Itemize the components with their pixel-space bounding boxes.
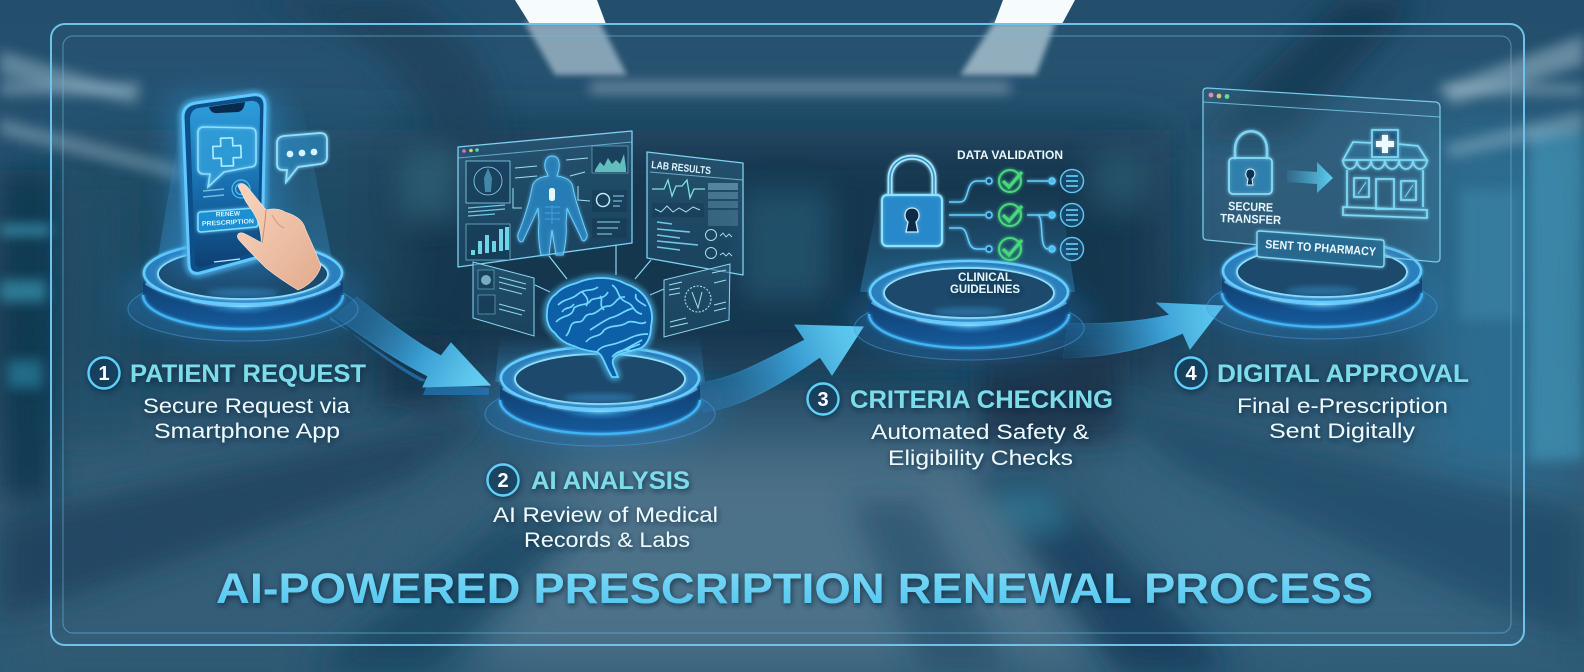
text: clinical guidelines: GUIDELINES (950, 284, 1020, 296)
step 3 label (808, 384, 1113, 470)
number badge 1 (88, 358, 120, 388)
step 2 illustration: AI brain with data panels (458, 131, 743, 452)
icon: hand tapping (237, 184, 321, 290)
text: clinical guidelines: CLINICAL (958, 272, 1012, 284)
heading: digital approval: DIGITAL APPROVAL (1217, 360, 1469, 388)
heading: AI analysis: AI ANALYSIS (531, 467, 690, 495)
text: step 4 description: Final e-Prescription (1237, 394, 1448, 418)
heading: lab results: LAB RESULTS (651, 159, 712, 177)
icon: document circles (1060, 170, 1084, 260)
icon: pharmacy storefront (1343, 130, 1427, 218)
panel: transfer window (1203, 88, 1440, 262)
heading: criteria checking: CRITERIA CHECKING (850, 386, 1113, 414)
panel: body scan dashboard (458, 131, 632, 267)
text: secure transfer: TRANSFER (1220, 211, 1282, 227)
icon: chat bubble (277, 133, 327, 182)
text: step 4 description: Sent Digitally (1269, 419, 1415, 443)
callout: sent to pharmacy (1257, 231, 1384, 267)
text: clinical guidelines (950, 272, 1020, 296)
text: step 3 description (871, 420, 1089, 470)
panel: lab results (647, 152, 743, 275)
arrow: patient request to AI analysis (330, 297, 490, 395)
icon: smartphone: PRESCRIPTION (202, 218, 254, 228)
icon: smartphone (183, 95, 265, 273)
icon: green checks (999, 170, 1022, 260)
step 2 label (488, 464, 718, 552)
number badge 4: 4 (1185, 363, 1197, 385)
number badge 3: 3 (817, 389, 829, 411)
number badge 3 (808, 384, 838, 414)
text: step 3 description: Automated Safety & (871, 420, 1089, 444)
icon: brain (547, 278, 652, 377)
step 1 label (88, 358, 366, 443)
text: secure transfer: SECURE (1228, 199, 1273, 215)
callout: sent to pharmacy: SENT TO PHARMACY (1265, 237, 1376, 259)
text: data validation: DATA VALIDATION (957, 150, 1063, 162)
icon: padlock (1229, 131, 1272, 194)
text: step 2 description (493, 503, 718, 552)
text: step 1 description (143, 394, 350, 443)
text: step 1 description: Secure Request via (143, 394, 350, 418)
step 3 illustration: security and validation checks (844, 150, 1094, 366)
arrow: AI analysis to criteria checking (700, 325, 863, 412)
text: secure transfer (1220, 199, 1282, 227)
number badge 4 (1176, 358, 1206, 388)
number badge 1: 1 (98, 363, 110, 385)
text: step 4 description (1237, 394, 1448, 443)
icon: transfer arrow (1287, 162, 1333, 193)
step 4 illustration: secure transfer to pharmacy (1197, 88, 1447, 345)
number badge 2 (488, 464, 518, 496)
panel: anatomy report (664, 264, 730, 337)
button label: RENEW (216, 210, 241, 219)
step 1 illustration: phone on platform (118, 95, 368, 347)
heading: patient request: PATIENT REQUEST (130, 360, 366, 388)
panel: scan report (473, 262, 534, 336)
step 4 label (1176, 358, 1469, 443)
connector lines (949, 178, 1055, 252)
text: step 2 description: AI Review of Medical (493, 503, 718, 527)
arrow: criteria checking to digital approval (1063, 303, 1223, 358)
text: step 1 description: Smartphone App (154, 419, 340, 443)
text: step 2 description: Records & Labs (524, 528, 690, 552)
title: AI-POWERED PRESCRIPTION RENEWAL PROCESS (216, 565, 1373, 613)
icon: padlock (882, 157, 942, 246)
number badge 2: 2 (497, 470, 509, 492)
text: step 3 description: Eligibility Checks (888, 446, 1073, 470)
